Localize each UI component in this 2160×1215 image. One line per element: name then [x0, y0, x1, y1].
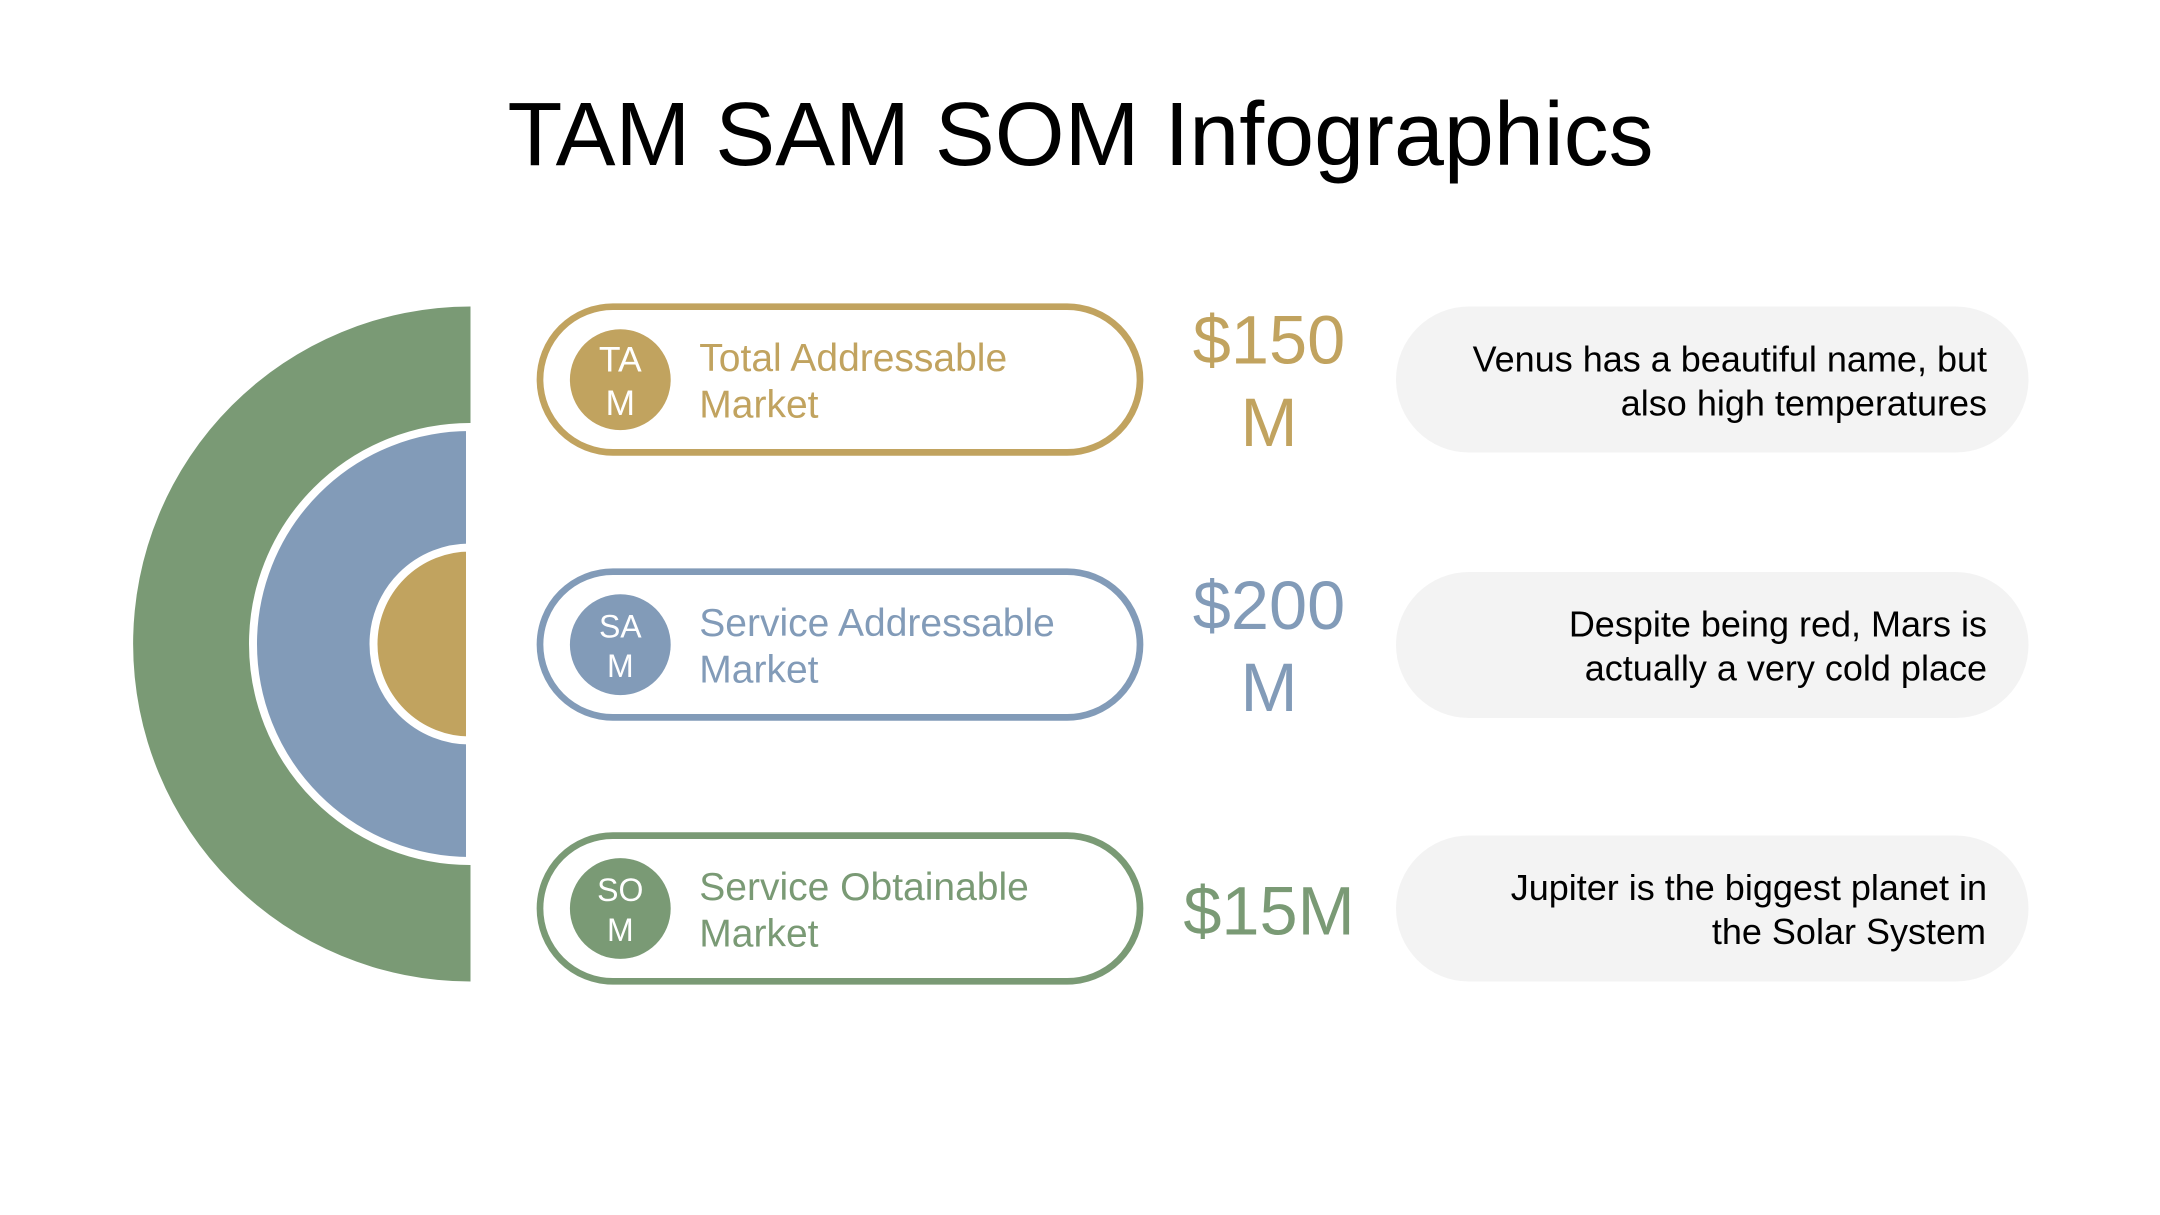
badge: SO [597, 872, 643, 908]
badge [570, 858, 671, 959]
description pill [1396, 572, 2028, 718]
description pill [1396, 836, 2028, 982]
description pill: Venus has a beautiful name, but [1473, 339, 1987, 380]
label pill [540, 307, 1140, 452]
row: SOM [540, 836, 2028, 982]
value: M [1240, 384, 1298, 461]
label text: Market [699, 384, 819, 427]
value: $200 [1193, 567, 1345, 644]
description pill: Jupiter is the biggest planet in [1511, 867, 1987, 908]
badge: M [607, 648, 634, 684]
label text: Market [699, 649, 819, 692]
semicircle: TAM [374, 548, 470, 740]
label text: Service Obtainable [699, 866, 1029, 909]
semicircle: SAM [253, 427, 470, 861]
title: TAM SAM SOM Infographics [507, 85, 1654, 185]
value: M [1240, 649, 1298, 726]
label text: Total Addressable [699, 337, 1007, 380]
chart: nested semicircles [133, 306, 470, 982]
badge: TA [599, 340, 642, 380]
semicircle: SOM [133, 306, 470, 982]
label text: Service Addressable [699, 602, 1055, 645]
label pill [540, 836, 1140, 981]
description pill: also high temperatures [1621, 383, 1987, 424]
badge: SA [599, 608, 642, 644]
value: $150 [1193, 302, 1345, 378]
description pill [1396, 306, 2028, 452]
row: TAM [540, 302, 2028, 461]
description pill: actually a very cold place [1585, 648, 1987, 688]
badge [570, 329, 671, 430]
label pill [540, 572, 1140, 717]
row: SAM [540, 567, 2028, 726]
description pill: the Solar System [1712, 911, 1986, 952]
badge: M [607, 912, 634, 948]
description pill: Despite being red, Mars is [1569, 604, 1987, 644]
badge: M [606, 383, 635, 423]
value: $15M [1183, 872, 1355, 950]
label text: Market [699, 913, 819, 956]
badge [570, 594, 671, 695]
